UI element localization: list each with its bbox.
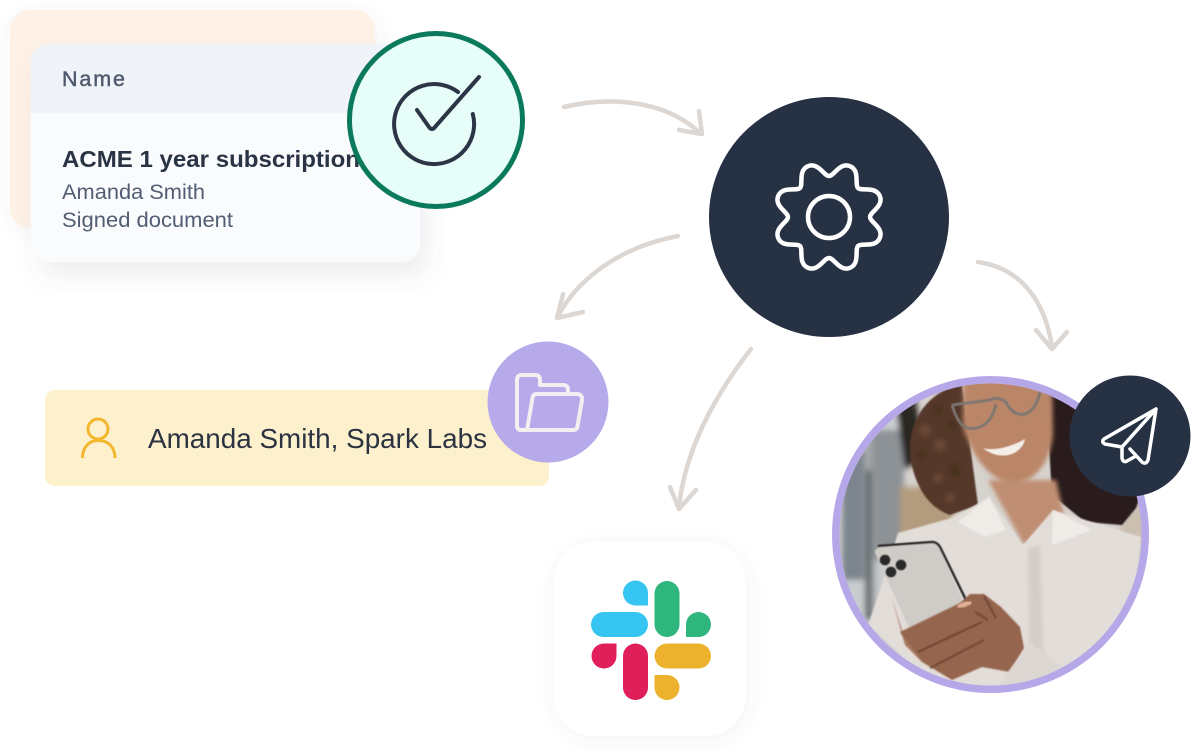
contact name: Amanda Smith, Spark Labs xyxy=(148,423,487,454)
header label: Name xyxy=(62,67,125,91)
card header band xyxy=(31,44,420,113)
neck xyxy=(988,480,1064,545)
hair: right xyxy=(1045,394,1138,526)
arrow: check to gear xyxy=(564,102,702,134)
panel: signed document cards xyxy=(10,10,420,262)
arrow: gear to slack xyxy=(670,349,751,509)
slack logo xyxy=(591,580,711,700)
document status: Signed document xyxy=(62,209,233,232)
icon: person xyxy=(82,419,115,458)
shirt xyxy=(868,497,1141,700)
blurred office background xyxy=(840,401,1142,655)
arrow: gear to person xyxy=(978,262,1067,349)
face xyxy=(963,380,1053,483)
back card xyxy=(10,10,375,228)
icon: gear circle xyxy=(709,97,949,337)
palm behind phone xyxy=(892,599,922,662)
hands xyxy=(900,594,1024,680)
hair: left xyxy=(910,384,978,515)
document title: ACME 1 year subscription xyxy=(62,146,360,172)
glasses and smile xyxy=(952,392,1040,456)
sleeve cuff xyxy=(1008,644,1042,678)
front card xyxy=(31,44,420,262)
signer name: Amanda Smith xyxy=(62,181,205,204)
phone xyxy=(875,542,970,630)
icon: slack tile xyxy=(554,542,746,736)
arrow: gear to contact xyxy=(557,236,678,318)
icon: folder badge xyxy=(488,342,608,462)
icon: green check badge xyxy=(350,34,522,206)
icon: paper plane badge xyxy=(1070,376,1190,496)
photo: woman holding phone xyxy=(832,376,1150,700)
panel: contact card xyxy=(45,390,549,486)
